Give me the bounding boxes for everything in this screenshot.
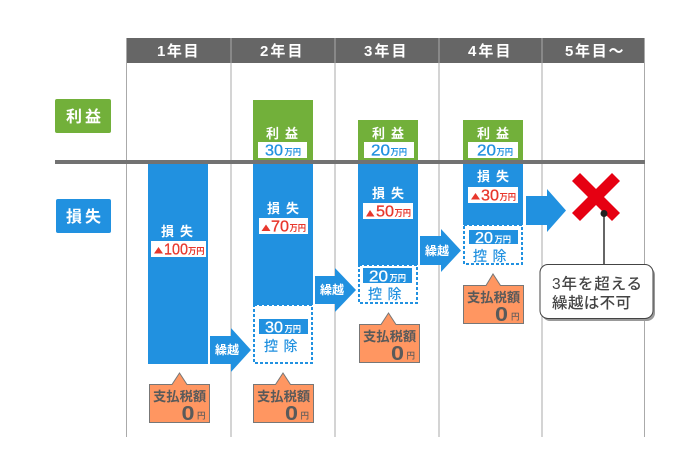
year 3 profit bar — [358, 120, 418, 160]
tax callout year 3: 円 — [406, 350, 415, 360]
row label: profit: 利益 — [66, 107, 104, 126]
year 4 deduction: 控除 — [473, 248, 512, 264]
year 4 loss bar: 万円 — [500, 192, 516, 202]
year 4 profit bar: 万円 — [496, 147, 513, 157]
tax callout year 2 — [254, 373, 314, 425]
year 4 deduction — [464, 225, 522, 264]
header bar: years: 1年目 — [157, 42, 200, 60]
axis line — [55, 160, 645, 164]
year 2 profit bar — [253, 100, 313, 160]
year 2 deduction: 控除 — [264, 338, 303, 354]
year 2 profit bar: 利益 — [266, 126, 304, 141]
year 4 loss bar: 30 — [481, 188, 499, 204]
year 2 loss bar: 損失 — [267, 201, 305, 216]
year 2 loss bar — [253, 164, 313, 305]
tax callout year 2: 支払税額 — [257, 388, 311, 404]
year 2 loss bar: 万円 — [290, 223, 306, 233]
header bar: years: 4年目 — [468, 42, 512, 60]
year 1 loss bar — [148, 164, 208, 364]
year 1 loss bar: 100 — [164, 242, 188, 258]
row label: loss: 損失 — [66, 208, 104, 226]
header bar: years — [126, 38, 645, 63]
year 4 deduction: 万円 — [494, 234, 511, 244]
year 3 loss bar — [358, 164, 418, 265]
year 4 profit bar — [463, 120, 523, 160]
tax callout year 1: 円 — [197, 410, 206, 420]
tax callout year 4: 支払税額 — [467, 289, 521, 305]
year 4 deduction: 20 — [475, 230, 493, 247]
tax callout year 1 — [150, 373, 210, 425]
tax callout year 1: 0 — [182, 403, 194, 425]
year 3 loss bar: 万円 — [394, 208, 411, 218]
row label: loss — [56, 199, 111, 233]
callout: carryforward limit note: 3年を超える — [552, 275, 642, 293]
header bar: years: 3年目 — [364, 42, 408, 60]
tax callout year 4 — [464, 274, 524, 326]
arrow: to year 5 — [526, 189, 566, 232]
icon: red cross — [572, 173, 620, 221]
year 3 deduction — [359, 265, 417, 303]
tax callout year 3 — [360, 313, 420, 365]
arrow: carryforward 2 — [315, 268, 356, 312]
callout: carryforward limit note: 繰越は不可 — [552, 294, 631, 312]
tax callout year 1: 支払税額 — [153, 388, 207, 404]
year 3 deduction: 控除 — [368, 286, 407, 302]
tax callout year 4: 円 — [511, 312, 520, 322]
year 4 profit bar: 20 — [477, 142, 496, 160]
year 2 profit bar: 30 — [265, 142, 283, 160]
year 3 loss bar: 50 — [376, 204, 394, 220]
year 3 profit bar: 20 — [371, 142, 390, 160]
year 1 loss bar: 損失 — [161, 224, 199, 239]
year 4 profit bar: 利益 — [477, 126, 515, 141]
year 3 profit bar: 万円 — [390, 147, 407, 157]
arrow: carryforward 3: 繰越 — [425, 243, 449, 258]
tax callout year 3: 0 — [391, 343, 404, 365]
year 1 loss bar: 万円 — [188, 246, 205, 256]
header bar: years: 5年目〜 — [565, 42, 625, 60]
tax callout year 2: 0 — [285, 403, 298, 425]
year 3 deduction: 万円 — [390, 273, 406, 283]
year 2 loss bar: 70 — [271, 218, 289, 236]
year 3 deduction: 20 — [369, 268, 388, 286]
year 4 loss bar: 損失 — [477, 169, 515, 184]
arrow: carryforward 3 — [420, 229, 461, 272]
connector line and dot — [600, 210, 608, 265]
year 2 deduction: 万円 — [284, 324, 301, 334]
year 2 deduction: 30 — [265, 320, 283, 336]
tax callout year 2: 円 — [300, 410, 309, 420]
arrow: carryforward 1 — [210, 328, 251, 372]
tax callout year 3: 支払税額 — [363, 328, 417, 344]
tax callout year 4: 0 — [495, 304, 508, 326]
year 3 profit bar: 利益 — [372, 126, 410, 141]
year 4 loss bar — [463, 164, 523, 225]
year 2 deduction — [254, 305, 312, 363]
callout: carryforward limit note — [540, 264, 655, 321]
arrow: carryforward 2: 繰越 — [320, 282, 344, 297]
year 3 loss bar: 損失 — [372, 186, 410, 201]
year 2 profit bar: 万円 — [284, 147, 301, 157]
row label: profit — [55, 99, 111, 133]
header bar: years: 2年目 — [260, 42, 304, 60]
arrow: carryforward 1: 繰越 — [215, 342, 239, 357]
